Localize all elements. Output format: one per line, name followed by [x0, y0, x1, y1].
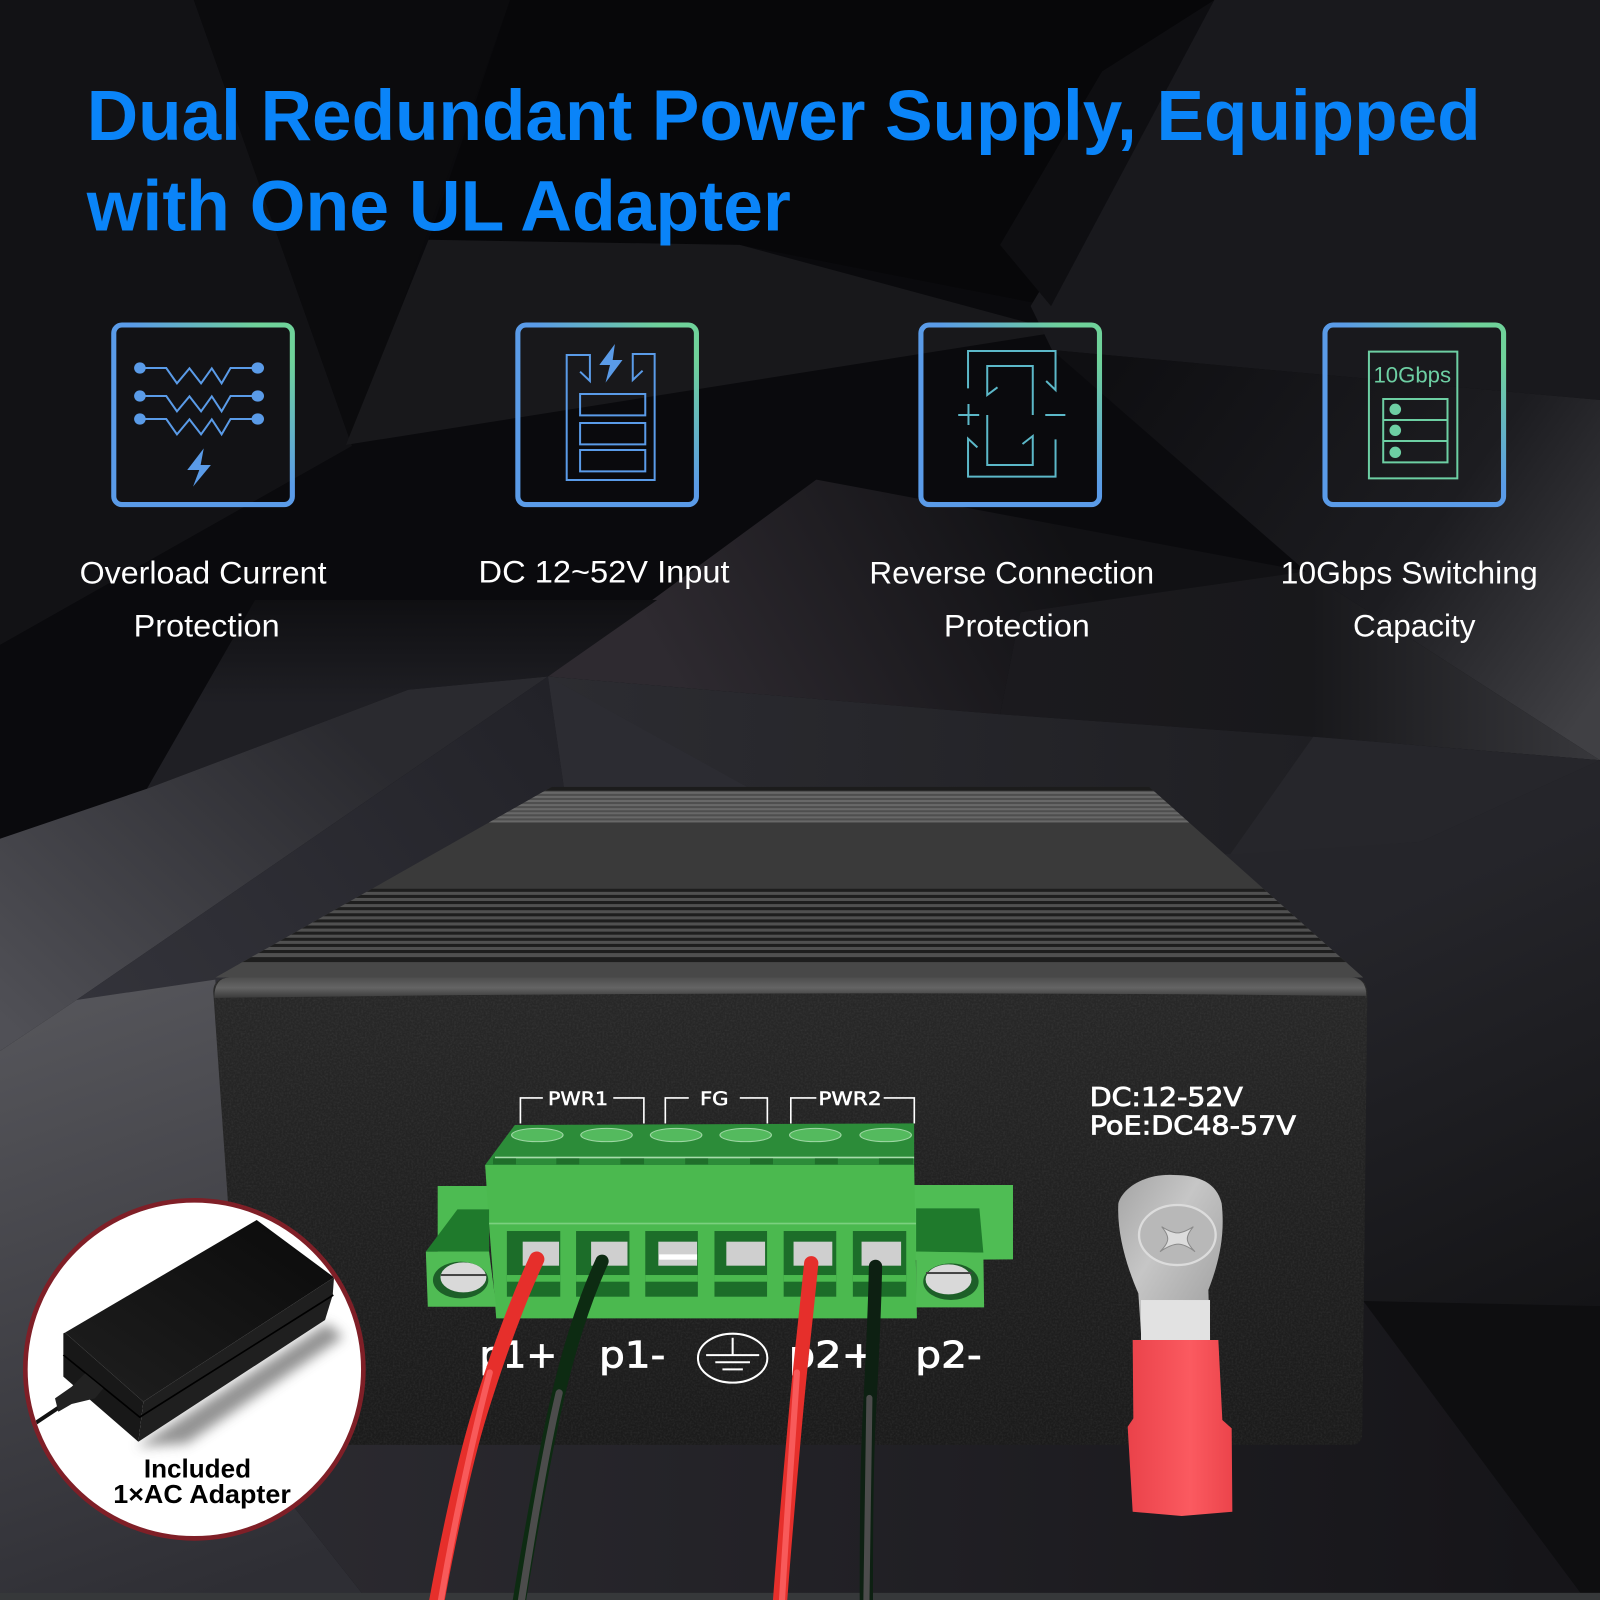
voltage rating text: PoE:DC48-57V: [1090, 1112, 1297, 1142]
icon: earth ground: [698, 1334, 767, 1383]
black wire p1-: [518, 1261, 602, 1600]
feature: overload current protection: [80, 325, 327, 644]
icon: overload current: [114, 325, 292, 505]
icon: reverse connection: [921, 325, 1099, 505]
caption: Reverse Connection: [869, 555, 1154, 591]
caption: Protection: [134, 608, 280, 644]
top face with wire holes: [485, 1123, 914, 1165]
wires: [436, 1259, 876, 1600]
PWR / FG labels: FG: [700, 1089, 729, 1110]
red wire p2+: [780, 1263, 811, 1600]
feature: DC input: [479, 325, 730, 590]
port labels printed on enclosure: p1+: [480, 1333, 557, 1376]
ring terminal: [1118, 1175, 1232, 1516]
caption: Protection: [944, 608, 1090, 644]
flanges: [438, 1186, 489, 1303]
metal lug: [1118, 1175, 1223, 1343]
icon: 10Gbps server: [1325, 325, 1504, 505]
port labels printed on enclosure: p1-: [599, 1333, 665, 1376]
icon: DC input: [518, 325, 696, 505]
terminal windows: [507, 1231, 906, 1297]
front body: [485, 1165, 917, 1318]
adapter caption: 1×AC Adapter: [113, 1481, 291, 1509]
title: with One UL Adapter: [86, 167, 791, 247]
enclosure top surface: [204, 787, 1378, 981]
caption: 10Gbps Switching: [1281, 555, 1538, 591]
right mount block: [916, 1208, 984, 1307]
title: [86, 76, 1481, 247]
AC adapter product: [35, 1220, 343, 1447]
caption: [1281, 555, 1538, 644]
red insulation sleeve: [1128, 1340, 1232, 1516]
voltage rating text: [1090, 1083, 1297, 1142]
port labels printed on enclosure: p2-: [915, 1333, 982, 1376]
green terminal block connector: [426, 1123, 1013, 1318]
title: Dual Redundant Power Supply, Equipped: [87, 76, 1481, 156]
caption: [869, 555, 1154, 644]
feature: reverse connection protection: [869, 325, 1154, 644]
caption: [80, 555, 327, 644]
caption: DC 12~52V Input: [479, 554, 730, 590]
device: switch enclosure: [204, 787, 1378, 1445]
left mount block: [426, 1209, 496, 1307]
red wire p1+: [436, 1259, 537, 1600]
PWR / FG labels: [520, 1089, 914, 1123]
adapter caption: Included: [144, 1456, 251, 1484]
PWR / FG labels: PWR1: [548, 1089, 608, 1110]
port labels printed on enclosure: [480, 1333, 982, 1383]
PWR / FG labels: PWR2: [818, 1089, 882, 1110]
feature: switching capacity: [1281, 325, 1538, 644]
enclosure rounded top edge: [214, 978, 1366, 998]
adapter caption: [113, 1456, 291, 1509]
black wire p2-: [866, 1266, 876, 1600]
caption: Overload Current: [80, 555, 327, 591]
port labels printed on enclosure: p2+: [789, 1333, 877, 1376]
adapter inset circle: [25, 1200, 363, 1538]
voltage rating text: DC:12-52V: [1090, 1083, 1243, 1113]
caption: Capacity: [1353, 608, 1476, 644]
screw head: [1139, 1205, 1216, 1265]
enclosure front face: [213, 978, 1367, 1445]
icon: 10Gbps server: 10Gbps: [1373, 363, 1451, 388]
